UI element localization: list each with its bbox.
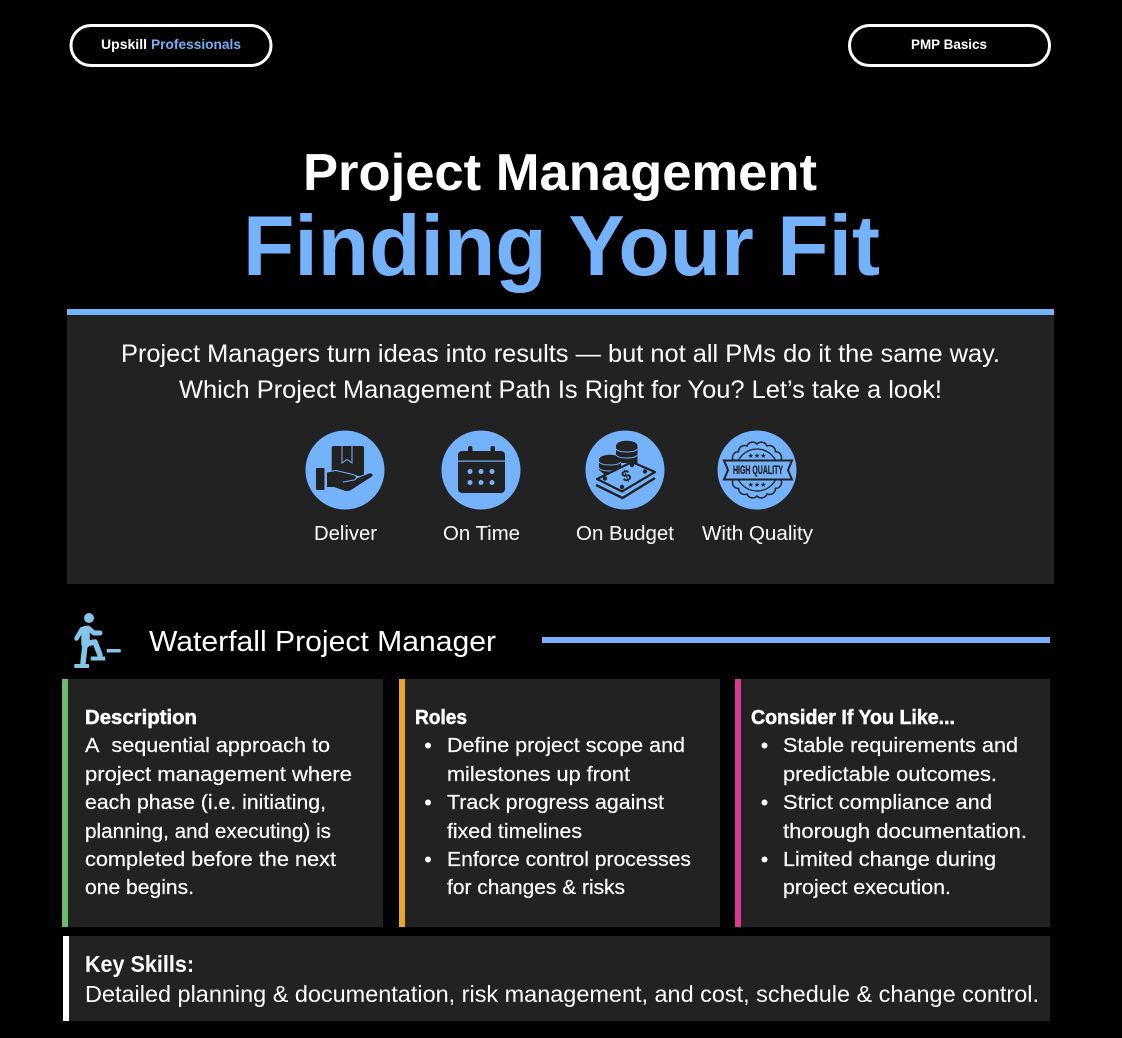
panel: description: A sequential approach to [85, 734, 330, 757]
panel: key skills: Key Skills: [85, 951, 194, 977]
panel: description: each phase (i.e. initiating, [85, 791, 326, 814]
icon labels: On Time [443, 523, 520, 545]
intro text: Which Project Management Path Is Right for You? Let’s take a look! [179, 376, 942, 404]
icon labels: Deliver [314, 523, 377, 545]
panel: roles: fixed timelines [447, 820, 582, 843]
panel: description: Description [85, 706, 197, 729]
title: Finding Your Fit [243, 199, 880, 294]
panel: consider if you like: Consider If You Like... [751, 706, 955, 729]
panel: description: one begins. [85, 876, 194, 899]
panel: description: completed before the next [85, 848, 336, 871]
badge: PMP Basics: PMP Basics [911, 37, 987, 52]
icon: person climbing steps [74, 613, 121, 668]
badge: PMP Basics [850, 26, 1050, 66]
panel: roles: Roles [415, 706, 467, 729]
panel: roles: for changes & risks [447, 876, 625, 899]
icon: on budget [586, 430, 664, 510]
icon: on budget: $ [619, 467, 634, 486]
panel: consider if you like: Strict compliance and [783, 791, 992, 814]
badge: Upskill Professionals: Professionals [151, 37, 241, 52]
badge: Upskill Professionals: Upskill [101, 37, 147, 52]
intro text [121, 340, 1000, 404]
panel: consider if you like: thorough documentation. [783, 820, 1027, 843]
icon: with quality: HIGH QUALITY [733, 463, 783, 477]
icon labels [314, 523, 813, 545]
panel: description: project management where [85, 763, 352, 786]
panel: roles: Define project scope and [447, 734, 685, 757]
icon: on time calendar [442, 430, 520, 510]
panel: roles: Track progress against [447, 791, 664, 814]
panel: consider if you like: Stable requirements and [783, 734, 1018, 757]
icon: deliver [306, 430, 384, 510]
title [243, 144, 880, 294]
icon: with quality [718, 430, 796, 510]
panel: roles: milestones up front [447, 763, 630, 786]
intro text: Project Managers turn ideas into results — but not all PMs do it the same way. [121, 340, 1000, 368]
panel: key skills [63, 936, 1050, 1021]
panel: description: planning, and executing) is [85, 820, 331, 843]
panel: roles [399, 679, 720, 927]
panel: consider if you like [735, 679, 1050, 927]
icon labels: With Quality [702, 523, 813, 545]
panel: consider if you like: project execution. [783, 876, 951, 899]
badge: Upskill Professionals [71, 26, 271, 66]
panel: key skills: Detailed planning & documentation, risk management, and cost, schedule & change control. [85, 981, 1039, 1007]
panel: description [62, 679, 383, 927]
icon: with quality: ★★★ [748, 481, 766, 489]
panel: consider if you like: Limited change during [783, 848, 996, 871]
heading: Waterfall Project Manager: Waterfall Project Manager [149, 626, 496, 658]
icon labels: On Budget [576, 523, 674, 545]
heading: Waterfall Project Manager [149, 626, 1050, 658]
title: Project Management [303, 144, 817, 202]
panel: consider if you like: predictable outcomes. [783, 763, 997, 786]
panel: introduction [67, 309, 1054, 584]
icon: with quality: ★★★ [748, 452, 766, 460]
panel: roles: Enforce control processes [447, 848, 691, 871]
